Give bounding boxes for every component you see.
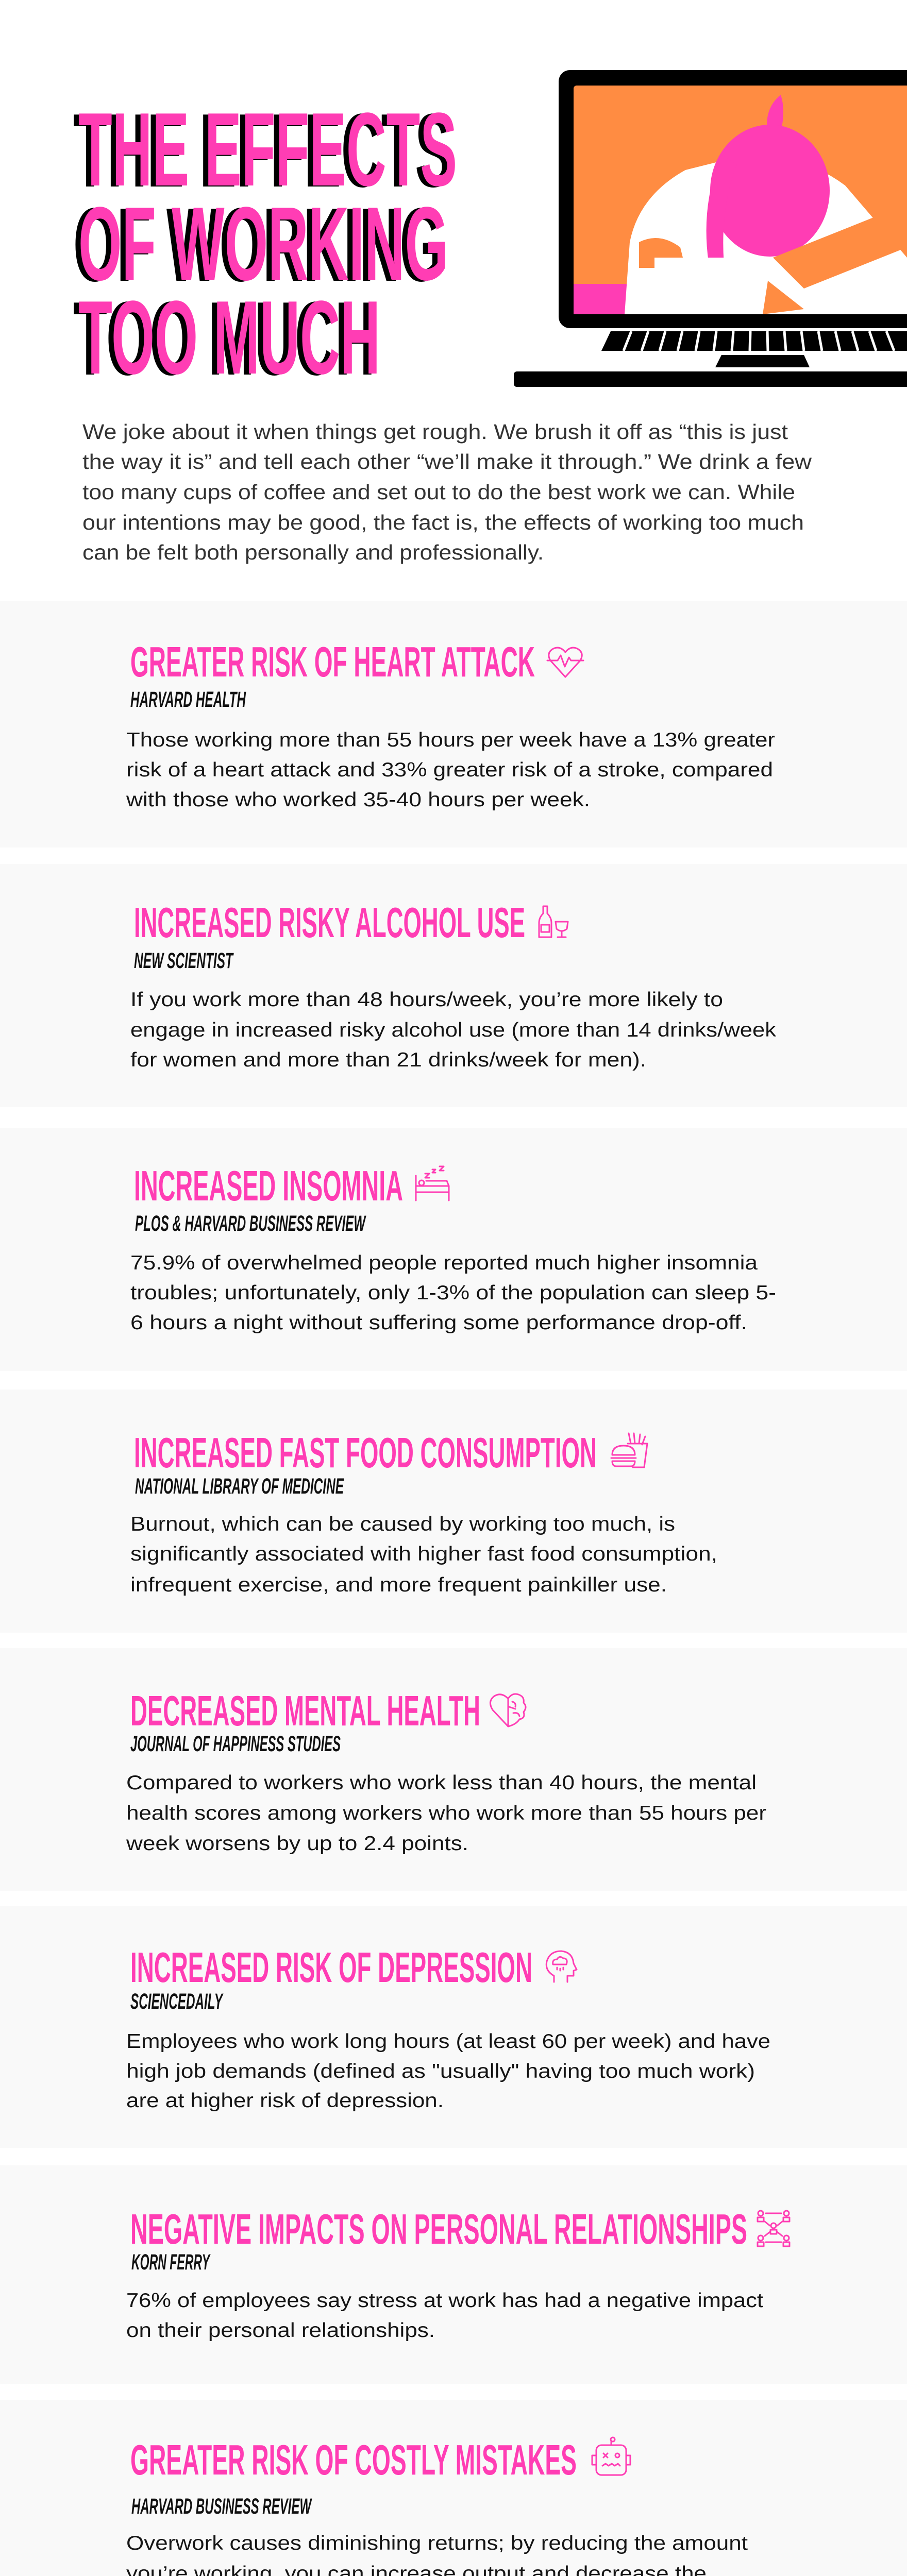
title: OF WORKING [73, 187, 443, 303]
illustration: monitor with exhausted worker [514, 70, 907, 387]
body text [126, 2290, 763, 2342]
body text: are at higher risk of depression. [126, 2090, 444, 2112]
source: PLOS & HARVARD BUSINESS REVIEW [135, 1211, 366, 1236]
panel: mistakes [0, 2400, 907, 2576]
source: KORN FERRY [131, 2250, 211, 2275]
body text: 6 hours a night without suffering some performance drop-off. [130, 1312, 747, 1334]
body text: 75.9% of overwhelmed people reported much higher insomnia [130, 1252, 758, 1274]
icon: broken robot [592, 2437, 630, 2475]
body text [126, 729, 775, 811]
heading: alcohol: INCREASED RISKY ALCOHOL USE [134, 899, 525, 946]
intro text: can be felt both personally and professionally. [82, 540, 544, 564]
panel: mental health [0, 1648, 907, 1891]
body text: If you work more than 48 hours/week, you’re more likely to [130, 989, 723, 1011]
body text: health scores among workers who work more than 55 hours per [126, 1802, 766, 1824]
body text: week worsens by up to 2.4 points. [126, 1833, 468, 1855]
body text [130, 1252, 776, 1334]
body text: 76% of employees say stress at work has had a negative impact [126, 2290, 763, 2312]
heading: heart attack: GREATER RISK OF HEART ATTACK [130, 638, 535, 686]
body text [130, 989, 777, 1071]
body text [126, 2030, 770, 2112]
title: TOO MUCH [73, 280, 375, 397]
panel: depression [0, 1906, 907, 2148]
body text: risk of a heart attack and 33% greater risk of a stroke, compared [126, 759, 773, 781]
heading: insomnia: INCREASED INSOMNIA [134, 1162, 403, 1210]
body text: high job demands (defined as "usually" having too much work) [126, 2060, 755, 2082]
intro text: our intentions may be good, the fact is, the effects of working too much [82, 511, 804, 534]
source: SCIENCEDAILY [130, 1989, 224, 2014]
body text: Employees who work long hours (at least 60 per week) and have [126, 2030, 770, 2053]
icon: people network [758, 2211, 790, 2246]
body text: Overwork causes diminishing returns; by reducing the amount [126, 2532, 748, 2554]
panel: heart attack [0, 601, 907, 848]
body text: on their personal relationships. [126, 2319, 435, 2342]
icon: head with cloud [546, 1951, 577, 1982]
intro text: the way it is” and tell each other “we’ll make it through.” We drink a few [82, 450, 812, 473]
icon: bed with zzz [416, 1166, 449, 1200]
panel: fast food [0, 1389, 907, 1633]
body text: for women and more than 21 drinks/week for men). [130, 1049, 646, 1071]
heading: mental health: DECREASED MENTAL HEALTH [130, 1687, 480, 1735]
intro text: We joke about it when things get rough. We brush it off as “this is just [82, 420, 788, 444]
title: THE EFFECTS [78, 91, 457, 208]
body text: Those working more than 55 hours per week have a 13% greater [126, 729, 775, 751]
panel: relationships [0, 2165, 907, 2384]
intro text: too many cups of coffee and set out to do the best work we can. While [82, 480, 795, 504]
body text: Compared to workers who work less than 40 hours, the mental [126, 1772, 757, 1794]
body text [130, 1513, 717, 1596]
source: HARVARD BUSINESS REVIEW [131, 2494, 312, 2519]
title: THE EFFECTS [73, 92, 452, 209]
heading: depression: INCREASED RISK OF DEPRESSION [130, 1943, 532, 1991]
body text: with those who worked 35-40 hours per week. [126, 789, 590, 811]
icon: heart pulse [547, 648, 583, 677]
title: OF WORKING [78, 185, 448, 302]
source: NEW SCIENTIST [134, 948, 234, 973]
body text: troubles; unfortunately, only 1-3% of the population can sleep 5- [130, 1282, 776, 1304]
icon: heart brain [490, 1694, 526, 1726]
body text: infrequent exercise, and more frequent painkiller use. [130, 1574, 667, 1596]
source: HARVARD HEALTH [130, 687, 246, 712]
title: TOO MUCH [78, 279, 380, 396]
icon: burger and fries [611, 1433, 647, 1467]
body text [126, 1772, 766, 1855]
source: NATIONAL LIBRARY OF MEDICINE [135, 1474, 344, 1499]
intro text [82, 420, 812, 564]
title [73, 91, 457, 397]
icon: bottle and glass [539, 906, 568, 937]
panel: alcohol [0, 864, 907, 1107]
body text: significantly associated with higher fast food consumption, [130, 1543, 717, 1565]
panel: insomnia [0, 1128, 907, 1371]
body text: engage in increased risky alcohol use (more than 14 drinks/week [130, 1019, 777, 1041]
body text [126, 2532, 748, 2576]
body text: Burnout, which can be caused by working too much, is [130, 1513, 675, 1535]
source: JOURNAL OF HAPPINESS STUDIES [130, 1732, 341, 1756]
